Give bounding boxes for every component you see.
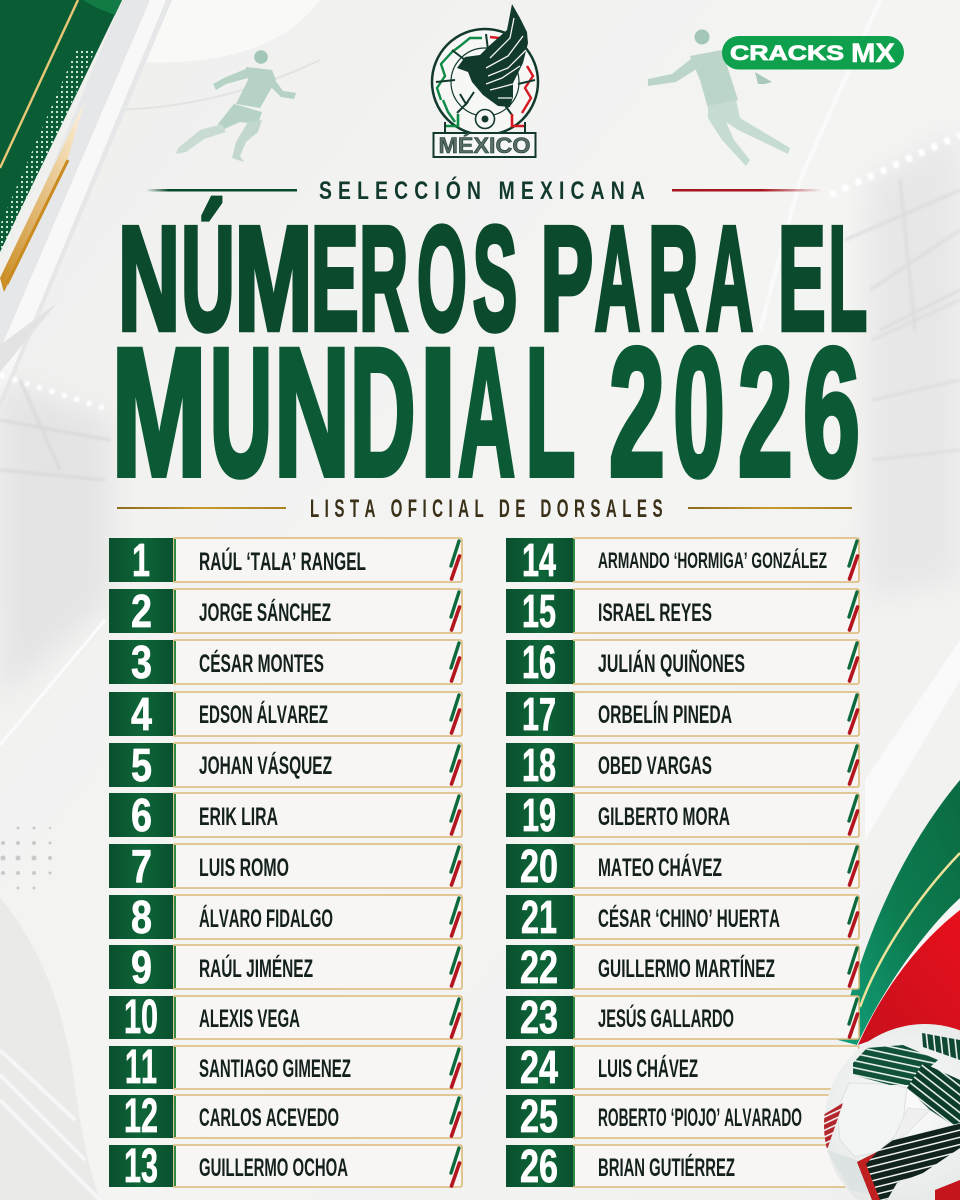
player list: left column [109,534,462,1193]
player 12: 12 [124,1090,158,1143]
title: N [274,310,350,514]
player 19: 19 [522,789,556,841]
player 24 [506,1041,859,1093]
player 14 [506,534,859,586]
title: N [118,196,180,362]
title: R [359,196,408,362]
player 15: ISRAEL REYES [598,599,712,627]
player 10: 10 [124,991,158,1044]
player 20 [506,840,859,892]
title: 2 [738,310,793,514]
player 26: 26 [520,1140,558,1192]
title: E [311,196,359,362]
corner graphic: top-left green band [0,0,122,292]
player 15: 15 [522,585,556,637]
player 8: 8 [131,891,152,943]
title: R [648,196,698,362]
player 4: 4 [131,688,152,740]
player 4 [109,688,462,740]
player 1 [109,534,462,586]
player 18: 18 [522,739,556,791]
player 22: 22 [520,941,558,993]
brand badge: Cracks MX [722,36,904,70]
player 11: SANTIAGO GIMENEZ [199,1055,351,1083]
player 1: 1 [132,534,150,586]
player 24: 24 [520,1041,558,1093]
player 1: RAÚL ‘TALA’ RANGEL [199,546,366,576]
player 8: ÁLVARO FIDALGO [199,904,333,933]
player 16: JULIÁN QUIÑONES [598,648,745,678]
player 15 [506,585,859,637]
text: L [828,196,867,362]
player 19 [506,789,859,841]
title: A [458,310,515,514]
player 17: ORBELÍN PINEDA [598,700,732,729]
player 6: 6 [131,789,152,841]
title: A [595,196,640,362]
title: 2 [609,310,665,514]
player 18: OBED VARGAS [598,752,712,780]
title: U [210,310,272,514]
player 9 [109,941,462,993]
player 6: ERIK LIRA [199,803,278,831]
title: Ú [181,196,235,362]
player 26 [506,1140,859,1192]
player 7: 7 [131,840,152,892]
player 7 [109,840,462,892]
player 2: JORGE SÁNCHEZ [199,598,331,627]
title: L [526,310,575,514]
player 18 [506,739,859,791]
player 9: 9 [131,941,152,993]
player 16 [506,636,859,688]
title: P [540,196,593,362]
player 25 [506,1090,859,1142]
player 19: GILBERTO MORA [598,803,730,831]
player 21: CÉSAR ‘CHINO’ HUERTA [598,904,780,933]
player 23 [506,991,859,1043]
player 23: JESÚS GALLARDO [598,1003,734,1033]
player 21: 21 [521,891,557,943]
title: D [350,310,416,514]
player 25: ROBERTO ‘PIOJO’ ALVARADO [598,1104,802,1132]
corner graphic: bottom-right swoosh [838,780,960,1045]
title: O [417,196,467,362]
player 6 [109,789,462,841]
player 5: JOHAN VÁSQUEZ [199,751,332,780]
player 21 [506,891,859,943]
player 4: EDSON ÁLVAREZ [199,700,328,729]
player 13: GUILLERMO OCHOA [199,1154,348,1182]
title: M [111,310,207,514]
player 11 [109,1041,462,1094]
player 22: GUILLERMO MARTÍNEZ [598,954,775,983]
player 11: 11 [125,1041,157,1094]
player 20: MATEO CHÁVEZ [598,853,722,882]
player 23: 23 [520,991,558,1043]
player 12: CARLOS ACEVEDO [199,1104,339,1132]
player 5: 5 [131,739,152,791]
player 17 [506,688,859,740]
title: M [234,196,312,362]
player 14: 14 [522,534,556,586]
subheading: Lista oficial de dorsales: LISTA OFICIAL DE DORSALES [310,495,668,523]
player 17: 17 [522,688,556,740]
title: E [778,196,826,362]
player 3: 3 [131,636,152,688]
player 2 [109,585,462,637]
player silhouette left [176,50,296,162]
player 10: ALEXIS VEGA [199,1005,300,1033]
player 7: LUIS ROMO [199,854,289,882]
title: S [473,196,517,362]
player 8 [109,891,462,943]
logo: México crest: MÉXICO [438,133,530,158]
player 14: ARMANDO ‘HORMIGA’ GONZÁLEZ [598,548,827,573]
player 24: LUIS CHÁVEZ [598,1054,698,1083]
player 25: 25 [520,1090,558,1142]
player 13 [109,1140,462,1193]
player 26: BRIAN GUTIÉRREZ [598,1153,735,1182]
player 22 [506,941,859,993]
brand badge: Cracks MX: CRACKS [730,42,844,65]
player 9: RAÚL JIMÉNEZ [199,953,313,983]
player 20: 20 [520,840,558,892]
title [111,196,867,514]
player 12 [109,1090,462,1143]
title: A [706,196,753,362]
player 13: 13 [124,1140,158,1193]
player 3: CÉSAR MONTES [199,649,324,678]
brand badge: Cracks MX: MX [851,38,895,68]
player 16: 16 [522,636,556,688]
title: 0 [673,310,725,514]
player 2: 2 [131,585,152,637]
heading kicker: Selección Mexicana: SELECCIÓN MEXICANA [319,175,651,205]
player 10 [109,991,462,1044]
player silhouette right [648,30,790,166]
player list: right column [506,534,859,1192]
player 5 [109,739,462,791]
title: 6 [803,310,860,514]
player 3 [109,636,462,688]
logo: México crest [432,4,538,158]
title: I [419,310,457,514]
football [822,1024,960,1200]
